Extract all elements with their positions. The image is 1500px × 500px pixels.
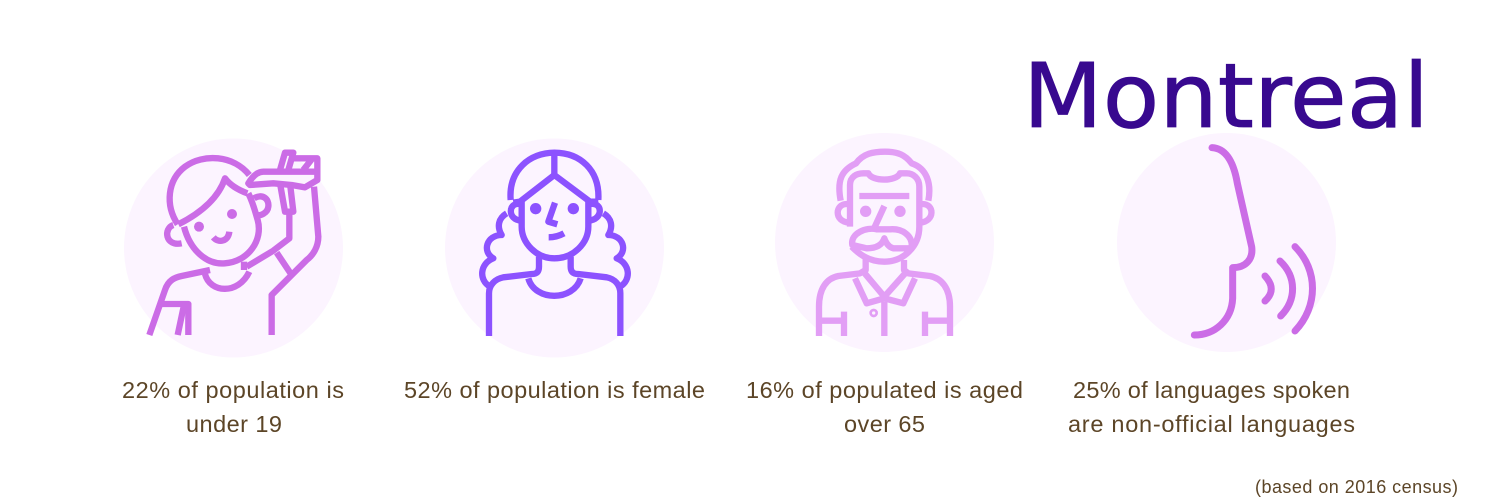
panel: youth: [122, 138, 344, 437]
background circle: languages: [1117, 133, 1336, 352]
label: youth: [122, 377, 344, 437]
label: languages: are non-official languages: [1068, 411, 1355, 437]
panel: seniors: [746, 133, 1023, 437]
label: youth: 22% of population is: [122, 377, 344, 403]
label: seniors: [746, 377, 1023, 437]
label: youth: under 19: [186, 411, 282, 437]
label: seniors: 16% of populated is aged: [746, 377, 1023, 403]
background circle: youth: [124, 138, 343, 358]
label: seniors: over 65: [844, 411, 925, 437]
icon: speaking profile: [1194, 148, 1312, 335]
label: languages: 25% of languages spoken: [1073, 377, 1350, 403]
icon: child with toy plane: [149, 153, 318, 335]
background circle: seniors: [775, 133, 994, 352]
panel: female: [404, 138, 705, 403]
title: Montreal: [1023, 44, 1429, 148]
label: languages: [1068, 377, 1355, 437]
panel: languages: [1068, 133, 1355, 437]
icon: older man: [819, 152, 950, 336]
footnote: (based on 2016 census): [1255, 477, 1458, 497]
label: female: 52% of population is female: [404, 377, 705, 403]
icon: woman: [482, 153, 628, 336]
background circle: female: [445, 138, 664, 358]
